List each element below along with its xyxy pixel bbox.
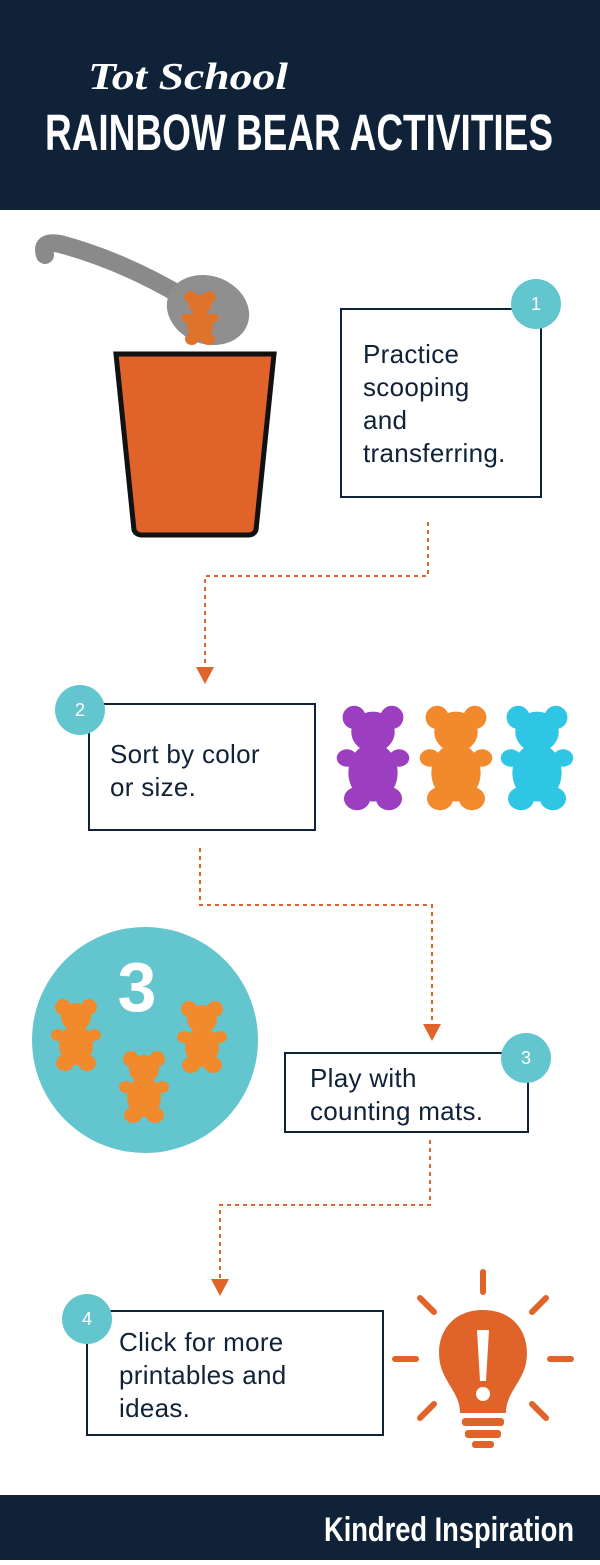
step 4 box: ideas. [119,1393,190,1423]
step 1 box: Practice [363,339,459,369]
step 3 box: Play with [310,1063,417,1093]
step 2 box: or size. [110,772,196,802]
step 4 box [86,1310,384,1436]
badge 4 [62,1294,112,1344]
badge 3 [501,1033,551,1083]
step 3 box: counting mats. [310,1096,483,1126]
step 2 box [88,703,316,831]
step 2 box: Sort by color [110,739,260,769]
step 4 box: printables and [119,1360,287,1390]
footer [0,1495,600,1560]
step 3 box [284,1052,529,1133]
icon: three bears [336,706,574,810]
illustration: cup with spoon and bear [35,234,277,538]
badge 1 [511,279,561,329]
counting mat circle [32,927,258,1153]
badge 2: 2 [75,700,85,720]
step 1 box: scooping [363,372,469,402]
subtitle: Tot School: Tot School [88,56,289,98]
badge 4: 4 [82,1309,92,1329]
badge 2 [55,685,105,735]
counting mat circle: 3 [118,948,156,1026]
step 4 box: Click for more [119,1327,284,1357]
header [0,0,600,210]
step 1 box: transferring. [363,438,506,468]
badge 1: 1 [531,294,541,314]
step 1 box [340,308,542,498]
step 1 box: and [363,405,407,435]
icon: lightbulb [392,1269,574,1448]
badge 3: 3 [521,1048,531,1068]
